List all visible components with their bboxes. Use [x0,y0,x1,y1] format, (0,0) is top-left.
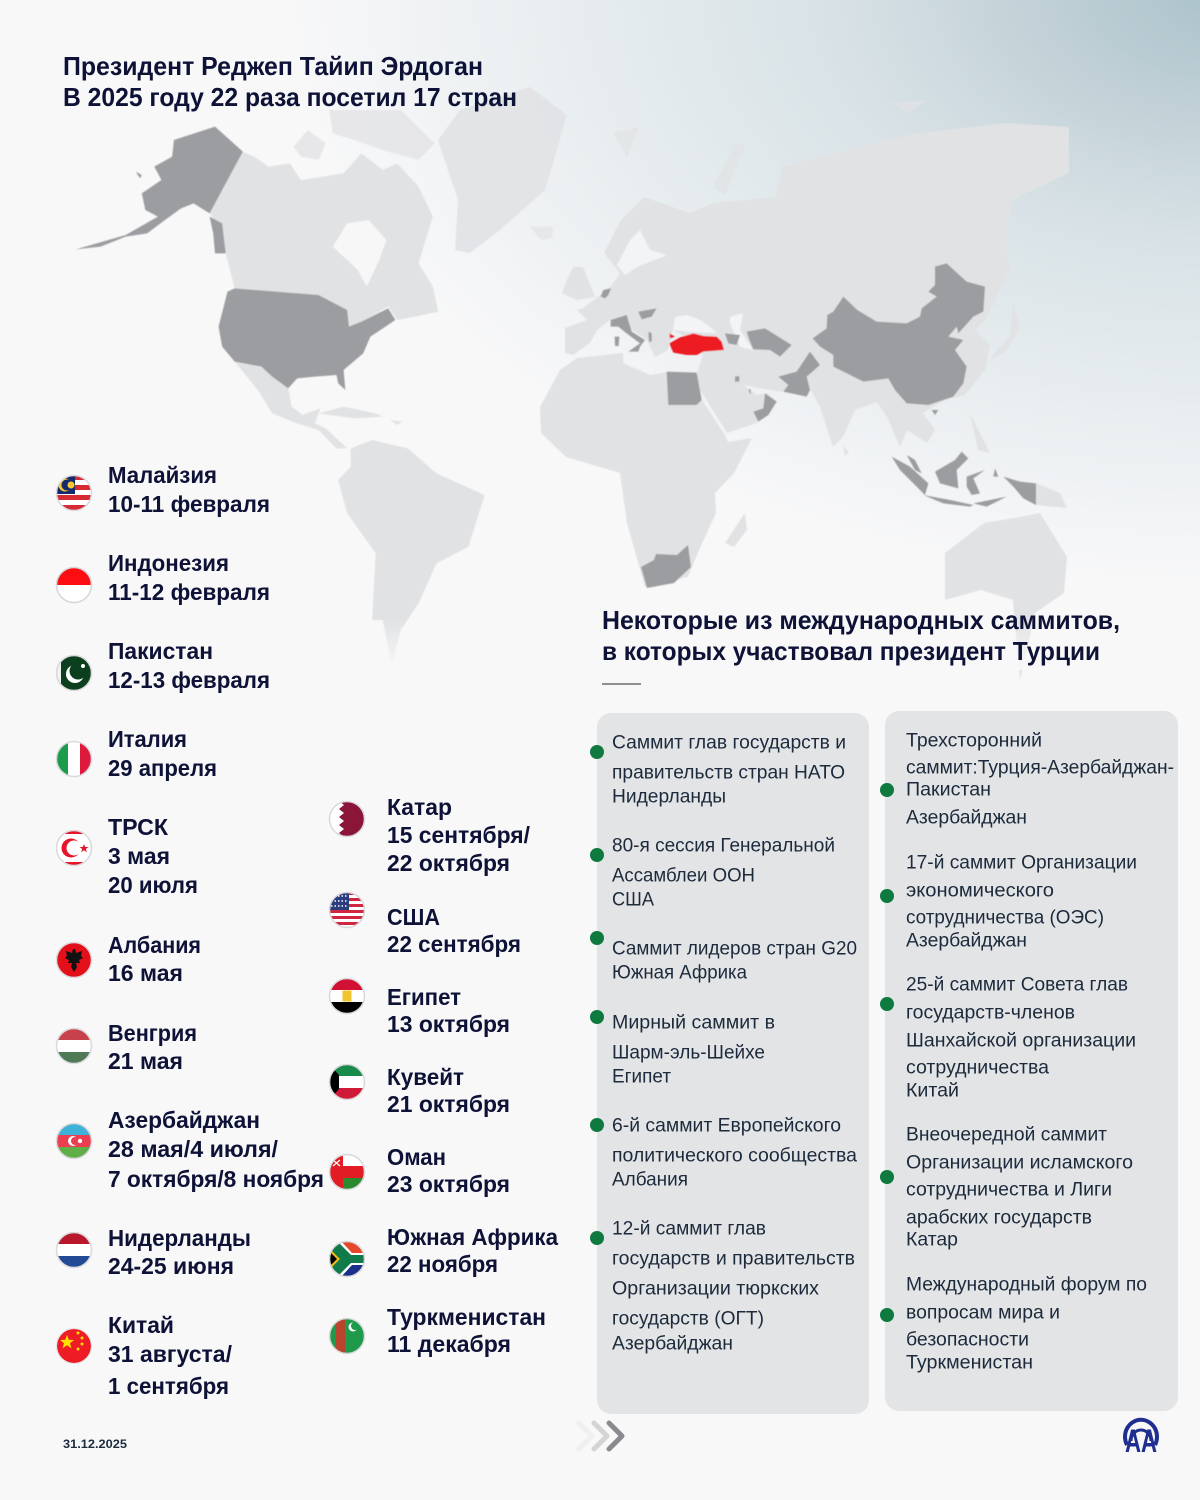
visit: Turkmenistan: Туркменистан [387,1304,546,1330]
map: highlighted countries, East Asia [813,263,1036,507]
visit: Qatar: 15 сентября/ [387,822,530,848]
Italy, Sardinia, Albania, Hungary, Netherlands [601,288,657,352]
summit: UN General Assembly: США [612,888,654,910]
summit: European Political Community: Албания [612,1168,688,1190]
summit: OTS: 12-й саммит глав [612,1218,766,1240]
flag: Turkmenistan [329,1318,365,1354]
date: 31.12.2025 [63,1437,127,1451]
visit: Hungary: Венгрия [108,1020,197,1046]
visit: Malaysia [56,462,270,517]
flag: Pakistan [56,655,92,691]
visit: TRNC [56,819,196,893]
visit: TRNC: 20 июля [108,872,198,898]
visit: Italy: Италия [108,726,187,752]
Australia [945,513,1067,680]
summit: OTS: государств (ОГТ) [612,1308,764,1330]
visit: Indonesia [56,550,270,605]
map: highlighted countries, Europe and Middle East [601,288,820,422]
logo: AA: AA [1125,1423,1157,1459]
summit: SCO: Шанхайской организации [906,1030,1136,1052]
summit: ECO [880,852,1137,952]
summit: OIC and Arab League: Внеочередной саммит [906,1124,1107,1146]
visit: Italy [56,726,217,781]
summit: OIC and Arab League: сотрудничества и Лиги [906,1178,1112,1200]
summit: trilateral [880,730,1174,828]
map: highlighted countries, Americas [76,127,395,390]
summit: NATO: Саммит глав государств и [612,732,846,754]
flag: TRNC [56,830,92,866]
visit: Oman [329,1144,510,1197]
visit: Qatar: Катар [387,794,452,820]
flag: Azerbaijan [56,1123,92,1159]
visit: Egypt: 13 октября [387,1011,510,1037]
summit: OTS [590,1218,855,1354]
flag: Kuwait [329,1064,365,1100]
Pakistan [778,352,820,397]
Iceland, Svalbard, Arctic islands [530,100,926,240]
flag: Albania [56,942,92,978]
summit: OIC and Arab League: арабских государств [906,1206,1092,1228]
summit: SCO: государств-членов [906,1002,1075,1024]
visit: Azerbaijan: 28 мая/4 июля/ [108,1136,278,1162]
summit: trilateral: саммит:Турция-Азербайджан- [906,756,1174,778]
Alaska [76,127,243,253]
visit: Malaysia: Малайзия [108,462,217,488]
visit: Kuwait: Кувейт [387,1064,464,1090]
visit: Albania: Албания [108,932,201,958]
visit: Pakistan [56,638,270,693]
visit: Hungary: 21 мая [108,1048,183,1074]
visit: South Africa: Южная Африка [387,1224,559,1250]
summit: NATO [590,732,846,808]
title [63,51,517,112]
flag: Malaysia [56,475,92,511]
flag: Egypt [329,978,365,1014]
panel: summits left [590,713,869,1414]
summit: trilateral: Азербайджан [906,806,1027,828]
Azerbaijan and Turkmenistan [725,328,792,357]
visit: Kuwait: 21 октября [387,1091,510,1117]
UK [562,267,595,300]
summits heading: Некоторые из международных саммитов, [602,605,1120,635]
visit: Azerbaijan [56,1107,324,1192]
summit: OTS: государств и правительств [612,1248,855,1270]
summit: OIC and Arab League: Организации исламского [906,1152,1133,1174]
flag: Netherlands [56,1232,92,1268]
visit: Indonesia: 11-12 февраля [108,579,270,605]
flag: Oman [329,1154,365,1190]
summit: European Political Community [590,1114,857,1190]
map: light land, Americas [210,110,485,667]
map: South Africa [641,545,691,588]
flag: USA [329,892,365,928]
summit: NATO: правительств стран НАТО [612,762,845,784]
summit: G20: Саммит лидеров стран G20 [612,938,857,960]
visit: Italy: 29 апреля [108,755,217,781]
flag: South Africa [329,1241,365,1277]
visit: TRNC: 3 мая [108,843,170,869]
visit: Malaysia: 10-11 февраля [108,491,270,517]
summit: ECO: сотрудничества (ОЭС) [906,906,1104,928]
visit: Egypt [329,978,510,1037]
visit: Turkmenistan: 11 декабря [387,1331,511,1357]
Korea, Japan, Philippines, Sri Lanka, New Guinea [843,303,1067,508]
flag: Qatar [329,801,365,837]
summit: peace forum: Международный форум по [906,1274,1147,1296]
summit: OIC and Arab League [880,1124,1133,1250]
visit: Netherlands: 24-25 июня [108,1253,234,1279]
summit: G20: Южная Африка [612,962,747,984]
visit: Indonesia: Индонезия [108,550,229,576]
summit: trilateral: Пакистан [906,778,991,800]
USA mainland [219,288,395,390]
summit: UN General Assembly [590,834,835,910]
Baltic, Black Sea, Caspian Sea [617,230,753,350]
visit: Egypt: Египет [387,984,461,1010]
visit: Pakistan: 12-13 февраля [108,667,270,693]
title: Президент Реджеп Тайип Эрдоган [63,51,483,81]
visit: China: 1 сентября [108,1373,229,1399]
summit: trilateral: Трехсторонний [906,730,1042,752]
summit: Sharm el-Sheikh: Шарм-эль-Шейхе [612,1042,765,1064]
summit: SCO: 25-й саммит Совета глав [906,974,1128,996]
summit: European Political Community: 6-й саммит Европейского [612,1114,841,1136]
logo: AA [1125,1420,1157,1459]
visit: China: Китай [108,1312,174,1338]
flag: China [56,1328,92,1364]
visit: China [56,1312,232,1399]
summit: NATO: Нидерланды [612,786,726,808]
summit: peace forum [880,1274,1147,1374]
summit: SCO [880,974,1136,1102]
visit: Albania: 16 мая [108,960,183,986]
summit: peace forum: безопасности [906,1328,1029,1350]
visit: Pakistan: Пакистан [108,638,213,664]
visit: USA: США [387,904,440,930]
visit: Hungary [56,1025,196,1069]
summit: Sharm el-Sheikh [590,1010,775,1088]
summits heading: в которых участвовал президент Турции [602,636,1100,666]
world map [0,87,1200,680]
title: В 2025 году 22 раза посетил 17 стран [63,82,517,112]
Egypt, Oman, Qatar, Kuwait [667,372,777,422]
summit: UN General Assembly: Ассамблеи ООН [612,864,755,886]
visit: Qatar [329,794,530,876]
China [813,263,985,415]
Turkey [669,333,724,355]
visit: Oman: Оман [387,1144,446,1170]
visit: South Africa [329,1224,559,1277]
summit: OTS: Организации тюркских [612,1278,819,1300]
summit: OTS: Азербайджан [612,1332,733,1354]
summit: ECO: экономического [906,880,1054,902]
visit: Qatar: 22 октября [387,850,510,876]
visit: Netherlands [56,1230,250,1274]
flag: Italy [56,741,92,777]
summit: SCO: сотрудничества [906,1056,1049,1078]
summit: ECO: 17-й саммит Организации [906,852,1137,874]
summit: G20 [590,931,857,984]
visit: China: 31 августа/ [108,1341,232,1367]
visit: USA [329,892,521,957]
visit: Oman: 23 октября [387,1171,510,1197]
Eurasia [565,123,1069,447]
visit: USA: 22 сентября [387,931,521,957]
summit: UN General Assembly: 80-я сессия Генеральной [612,834,835,856]
Madagascar [725,513,747,547]
summit: ECO: Азербайджан [906,930,1027,952]
Greenland [438,87,567,253]
visit: Netherlands: Нидерланды [108,1225,251,1251]
panel: summits right [880,711,1178,1411]
visit: Azerbaijan: Азербайджан [108,1107,260,1133]
visit: South Africa: 22 ноября [387,1251,498,1277]
visit: Albania [56,936,200,981]
summit: peace forum: вопросам мира и [906,1302,1060,1324]
summit: SCO: Китай [906,1080,959,1102]
Indonesia and Malaysia [892,452,1036,507]
visit: Kuwait [329,1064,510,1117]
icon: chevrons [579,1423,622,1449]
summit: Sharm el-Sheikh: Мирный саммит в [612,1012,775,1034]
flag: Hungary [56,1028,92,1064]
map: light land, Greenland and Eurasia [438,87,1069,680]
visit: Azerbaijan: 7 октября/8 ноября [108,1166,324,1192]
summits heading [602,605,1120,666]
summit: peace forum: Туркменистан [906,1352,1033,1374]
summit: Sharm el-Sheikh: Египет [612,1066,671,1088]
summit: OIC and Arab League: Катар [906,1228,958,1250]
visit: TRNC: ТРСК [108,814,169,840]
visit: Turkmenistan [329,1304,546,1357]
Africa [540,353,752,587]
flag: Indonesia [56,567,92,603]
summit: European Political Community: политического сообщества [612,1144,857,1166]
